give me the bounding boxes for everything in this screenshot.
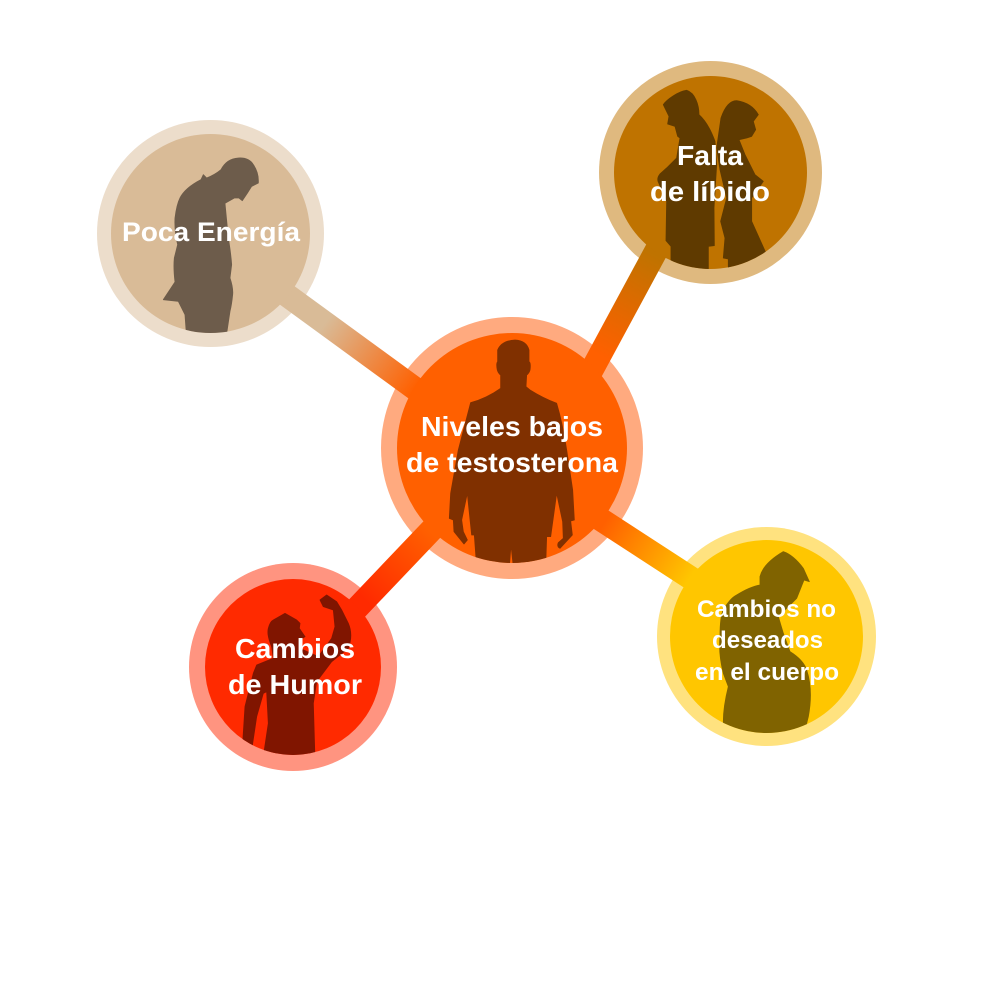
outer rings [97,61,876,771]
panel: Falta de líbido [614,76,807,275]
panel: Niveles bajos de testosterona: de testosterona [406,447,618,478]
panel: Cambios de Humor [205,579,381,760]
icon: angry man silhouette [243,595,351,760]
icon: couple back to back silhouette [658,90,767,275]
panel: Cambios no deseados en el cuerpo: deseados [712,627,823,654]
panel: Falta de líbido: de líbido [650,176,770,207]
icon: tired man silhouette [163,158,258,338]
label: Falta [677,140,743,171]
label: Cambios no [697,596,836,623]
icon: man in suit silhouette [449,340,574,567]
panel: Cambios no deseados en el cuerpo: en el cuerpo [695,659,839,686]
panel: Niveles bajos de testosterona [397,333,627,567]
panel: Cambios de Humor: de Humor [228,669,362,700]
panel: Cambios no deseados en el cuerpo [670,540,863,737]
icon: overweight man silhouette [720,552,810,737]
panel: Poca Energía [111,134,310,338]
connectors [240,190,740,647]
label: Cambios [235,633,355,664]
label: Niveles bajos [421,411,603,442]
label: Poca Energía [122,217,301,247]
